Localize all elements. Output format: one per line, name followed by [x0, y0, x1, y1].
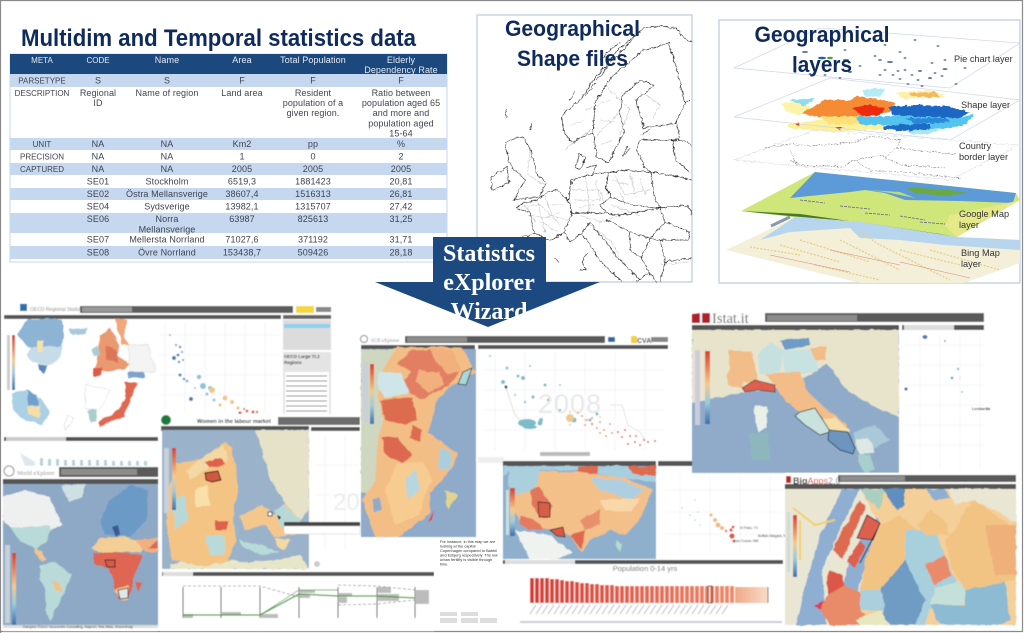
data table: SE08	[87, 248, 109, 258]
data table: 13982,1	[225, 202, 259, 212]
data table: CAPTURED	[20, 165, 64, 174]
screenshot: Istat Italy: Lombardia	[972, 407, 990, 411]
notes text panel: and Esbjerg respectively. The low	[440, 552, 498, 558]
screenshot: SCB explorer Sweden: SCB eXplorer	[371, 339, 400, 344]
data table: 509426	[298, 248, 328, 258]
screenshot: SCB explorer Sweden: CVA	[637, 338, 651, 345]
country border layer	[734, 130, 1020, 180]
europe outline map	[491, 26, 692, 282]
data table: NA	[92, 139, 104, 149]
data table: Stockholm	[146, 176, 188, 186]
data table: 20,81	[389, 176, 413, 186]
data table: Land area	[221, 88, 263, 98]
panel: geographical layers	[719, 20, 1020, 283]
shape layer	[780, 88, 975, 134]
google map layer	[741, 172, 1020, 237]
data table: 1516313	[295, 189, 331, 199]
screenshot: Istat Italy	[692, 311, 990, 474]
data table: Mellansverige	[139, 224, 195, 234]
data table: 0	[310, 152, 316, 162]
data table: 371192	[298, 234, 328, 244]
data table: Övre Norrland	[138, 248, 196, 258]
data table: 825613	[298, 214, 328, 224]
data table: 1	[239, 152, 245, 162]
screenshot: OECD regional statistics	[3, 304, 331, 467]
data table	[10, 54, 447, 262]
data table: NA	[161, 164, 173, 174]
screenshot: USA explorer: Las Cruces, NM	[734, 539, 758, 543]
layer labels: Bing Map	[961, 248, 1000, 258]
pie chart layer	[734, 28, 1020, 88]
data table: Ratio between	[372, 88, 430, 98]
data table: Dependency Rate	[364, 65, 438, 75]
data table: given region.	[287, 108, 339, 118]
notes text panel: Copenhagen compared to Babbil	[440, 548, 497, 553]
data table: PRECISION	[20, 152, 64, 162]
data table: pp	[308, 139, 318, 149]
heading: layers: Geographical	[754, 22, 890, 47]
data table: 63987	[229, 214, 255, 224]
data table: 2	[398, 152, 404, 162]
data table: SE07	[87, 234, 109, 244]
title: multidimensional data: Multidim and Temporal statistics data	[21, 25, 417, 52]
screenshot: OECD regional statistics: Regions	[284, 360, 302, 365]
screenshot: SCB explorer Sweden: 2008	[538, 389, 602, 419]
data table: NA	[92, 164, 104, 174]
data table: 1315707	[295, 202, 331, 212]
layer labels: layer	[959, 220, 979, 230]
data table: 26,81	[389, 189, 413, 199]
data table: 2005	[391, 164, 411, 174]
data table: 71027,6	[225, 234, 259, 244]
data table: population of a	[283, 98, 343, 108]
layer labels: Shape layer	[961, 100, 1010, 110]
heading: shape files: Shape files	[517, 46, 628, 71]
arrow: statistics explorer wizard: eXplorer	[443, 270, 535, 296]
data table: META	[31, 56, 53, 65]
data table: 153438,7	[223, 248, 261, 258]
screenshot: USA explorer: Buffalo-Niagara, NY	[758, 534, 789, 538]
data table: Resident	[295, 88, 332, 98]
screenshot: OECD regional statistics: OECD Large TL2	[284, 354, 320, 359]
arrow: statistics explorer wizard: Wizard	[451, 299, 528, 325]
data table: Norra	[155, 214, 179, 224]
screenshot: Istat Italy: Istat.it	[712, 311, 749, 327]
data table: Elderly	[387, 55, 416, 65]
screenshot: USA explorer: El Paso, TX	[740, 526, 759, 530]
data table: 2005	[303, 164, 323, 174]
data table: 2005	[232, 164, 252, 174]
parallel coordinates chart	[160, 571, 434, 631]
notes text panel: time.	[440, 562, 448, 566]
data table: F	[398, 76, 404, 86]
layer labels	[954, 54, 1013, 269]
data table: %	[397, 139, 405, 149]
data table: 31,71	[389, 234, 413, 244]
screenshot: women in the labour market, Denmark: Women in the labour market	[197, 419, 271, 425]
notes text panel	[434, 538, 504, 628]
screenshot: OECD regional statistics: OECD Regional Statistics	[30, 307, 87, 313]
screenshot: world explorer	[3, 466, 158, 631]
screenshot: SCB explorer Sweden	[360, 335, 669, 537]
data table: UNIT	[33, 140, 51, 149]
data table: NA	[161, 139, 173, 149]
screenshot: world explorer: Samples ©2012 Geocentre Consulting, NaproV, Tele Atlas, Sharedmap	[23, 625, 133, 629]
data table: S	[164, 76, 170, 86]
data table: Km2	[233, 139, 251, 149]
data table: 38607,4	[225, 189, 259, 199]
heading: layers	[754, 22, 890, 77]
data table: Regional	[80, 88, 116, 98]
data table: NA	[161, 152, 173, 162]
data table: population aged	[368, 118, 434, 128]
data table: S	[95, 76, 101, 86]
layer labels: Country	[959, 141, 992, 151]
data table: Area	[232, 55, 252, 65]
data table: 15-64	[389, 128, 413, 138]
data table: SE04	[87, 202, 109, 212]
layer labels: Google Map	[959, 209, 1009, 219]
data table: 31,25	[389, 214, 413, 224]
screenshot: BigApps New York: BigApps2.0	[793, 476, 841, 486]
bing map layer	[726, 217, 1020, 283]
data table: 1881423	[295, 176, 331, 186]
data table: Total Population	[280, 55, 346, 65]
data table: 6519,3	[228, 176, 256, 186]
screenshot: USA explorer	[503, 460, 789, 630]
data table: SE02	[87, 189, 109, 199]
data table: 28,18	[389, 248, 413, 258]
data table: ID	[93, 98, 103, 108]
screenshot: USA explorer: Population 0-14 yrs	[613, 564, 678, 573]
shape layer frame	[734, 78, 1020, 140]
notes text panel: urban fertility is visible through	[440, 557, 492, 562]
data table: PARSETYPE	[18, 76, 66, 86]
data table: and more and	[373, 108, 429, 118]
arrow: statistics explorer wizard: Statistics	[443, 241, 535, 267]
data table: NA	[92, 152, 104, 162]
data table: Sydsverige	[144, 202, 190, 212]
arrow: statistics explorer wizard	[375, 237, 600, 327]
screenshot: world explorer: World eXplorer	[17, 471, 55, 477]
data table: F	[310, 76, 316, 86]
data table: F	[239, 76, 245, 86]
data table: SE06	[87, 214, 109, 224]
heading: shape files: Geographical	[505, 16, 640, 41]
data table: population aged 65	[362, 98, 440, 108]
data table: CODE	[86, 56, 110, 65]
screenshot: women in the labour market, Denmark: 20	[333, 489, 360, 516]
notes text panel: looking at the capital	[440, 544, 476, 548]
layer labels: Pie chart layer	[954, 54, 1013, 64]
data table: 27,42	[389, 202, 413, 212]
heading: shape files	[505, 16, 640, 71]
data table: DESCRIPTION	[15, 89, 70, 98]
panel: geographical shape files	[477, 15, 692, 282]
data table: Name	[155, 55, 179, 65]
data table: Östra Mellansverige	[126, 189, 208, 199]
screenshot: women in the labour market, Denmark	[160, 414, 361, 574]
layer labels: layer	[961, 259, 981, 269]
data table: Mellersta Norrland	[129, 234, 205, 244]
data table: Name of region	[136, 88, 198, 98]
data table: SE01	[87, 176, 109, 186]
screenshot: BigApps New York	[785, 473, 1017, 626]
heading: layers: layers	[792, 52, 852, 77]
notes text panel: For instance, in this map we are	[440, 539, 495, 544]
layer labels: border layer	[959, 152, 1008, 162]
